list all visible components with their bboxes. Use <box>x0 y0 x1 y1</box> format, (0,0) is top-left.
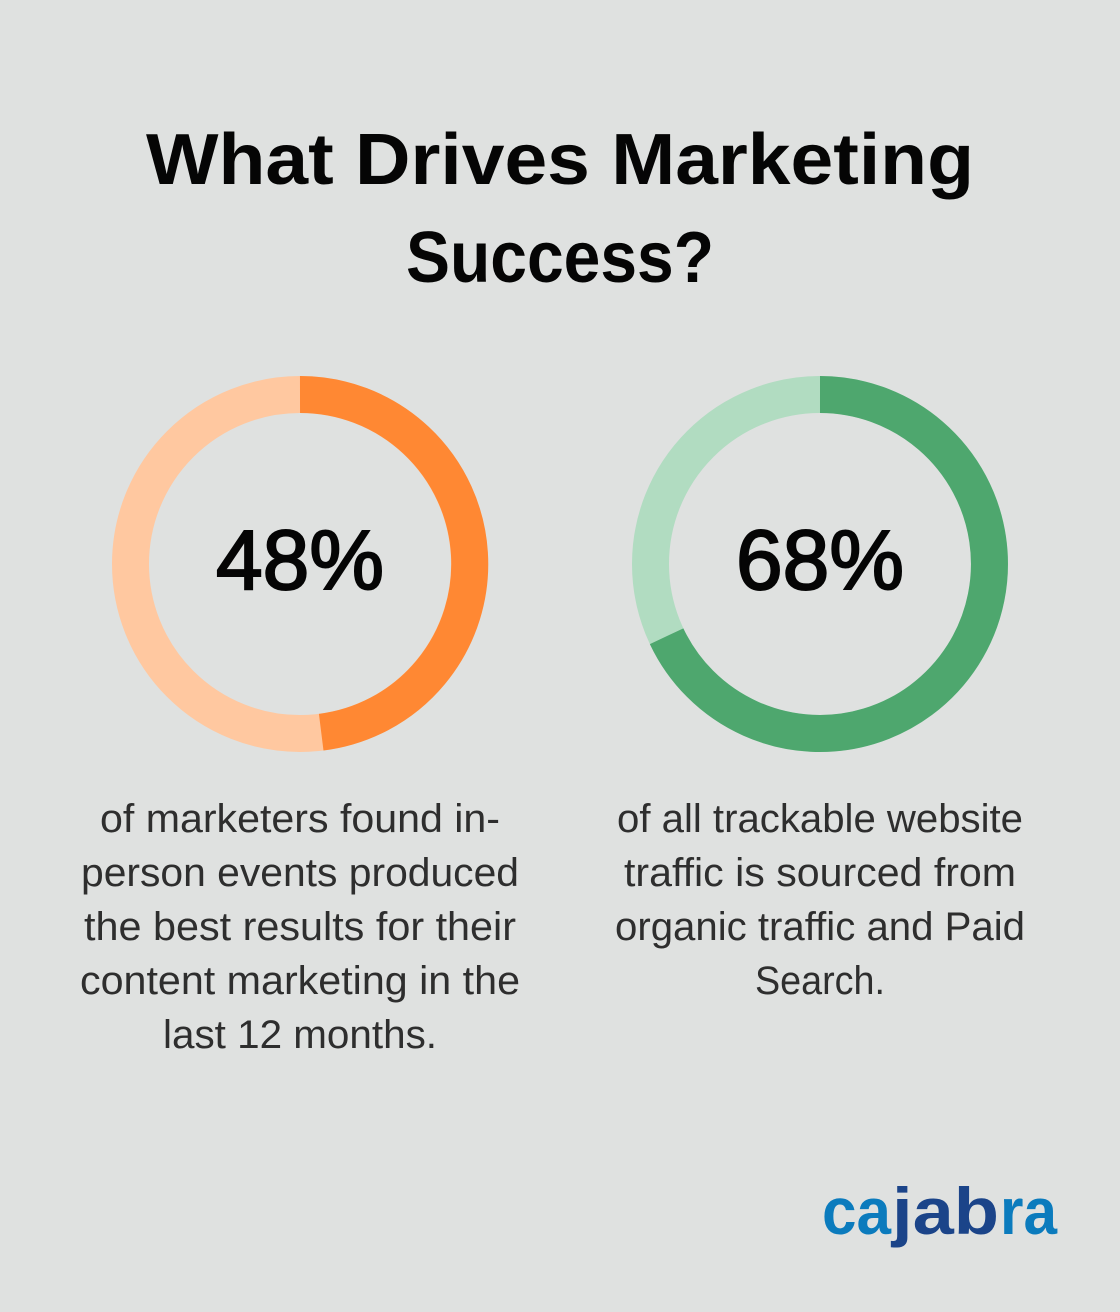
logo: cajabra: ca <box>822 1174 892 1248</box>
text block: in-person events: person events produced <box>81 851 519 895</box>
text block: website traffic: traffic is sourced from <box>624 851 1016 895</box>
text block: website traffic <box>615 797 1025 1003</box>
text block: in-person events: of marketers found in- <box>100 797 500 841</box>
donut chart: 68% <box>650 394 990 734</box>
donut chart: 48% <box>130 394 470 734</box>
title: What Drives Marketing <box>146 120 974 200</box>
text block: in-person events: content marketing in the <box>80 959 520 1003</box>
logo: cajabra: ra <box>1000 1174 1058 1248</box>
logo: cajabra <box>822 1174 1058 1248</box>
text block: website traffic: organic traffic and Paid <box>615 905 1025 949</box>
text block: website traffic: of all trackable website <box>617 797 1023 841</box>
donut chart: 48%: 48% <box>216 513 384 607</box>
title: Success? <box>406 218 714 298</box>
text block: in-person events <box>80 797 520 1057</box>
logo: cajabra: jab <box>890 1174 999 1248</box>
text block: in-person events: the best results for their <box>84 905 516 949</box>
text block: website traffic: Search. <box>755 959 885 1003</box>
text block: in-person events: last 12 months. <box>163 1013 437 1057</box>
donut chart: 68%: 68% <box>736 513 904 607</box>
title <box>146 120 974 298</box>
